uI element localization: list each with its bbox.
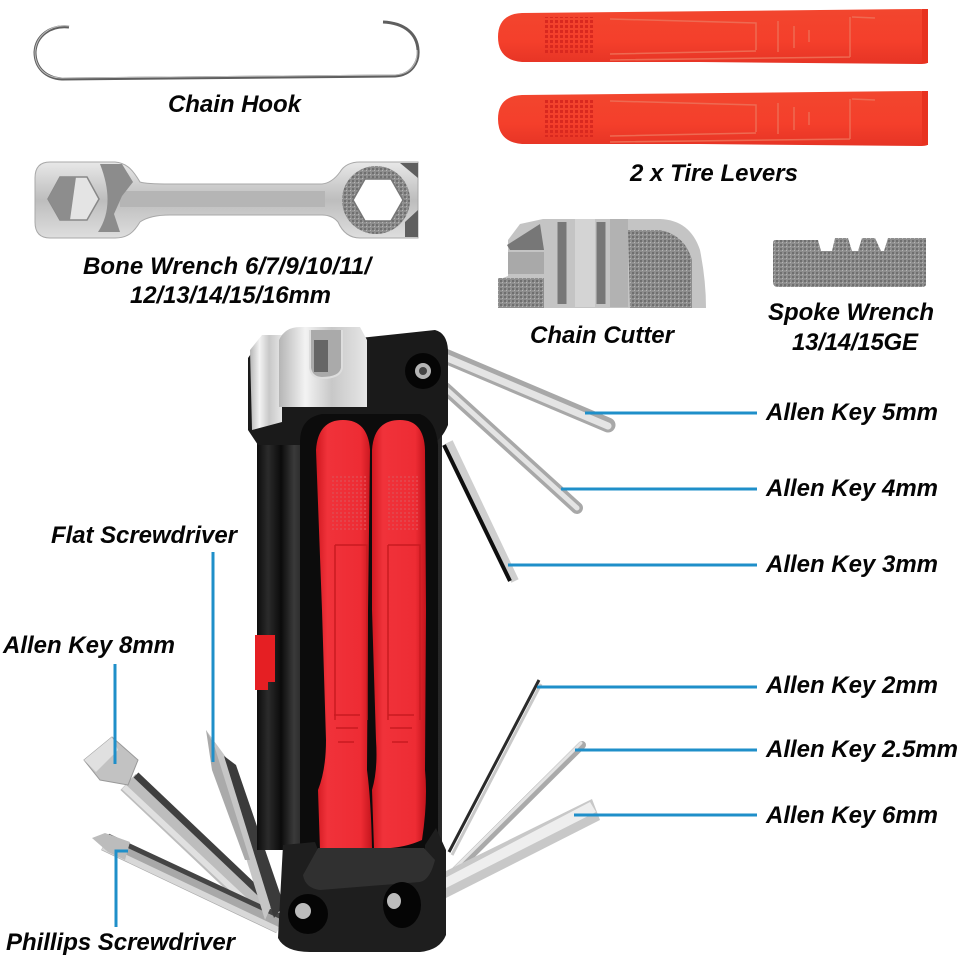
label: tire levers: 2 x Tire Levers: [629, 160, 798, 187]
label: chain hook: Chain Hook: [168, 91, 303, 118]
label: spoke wrench: [768, 299, 934, 356]
label: allen key 2.5mm: Allen Key 2.5mm: [765, 736, 958, 763]
chain cutter: [498, 219, 706, 308]
callout line: phillips screwdriver: [116, 851, 128, 927]
label: allen key 3mm: Allen Key 3mm: [765, 551, 938, 578]
callout line: allen key 2.5mm: [575, 748, 757, 752]
callout line: flat screwdriver: [212, 552, 214, 762]
label: bone wrench: [83, 253, 373, 309]
label: flat screwdriver: Flat Screwdriver: [51, 522, 239, 549]
bottom right screw: [383, 882, 421, 928]
lever recess: [300, 414, 438, 850]
spoke wrench: [773, 238, 926, 287]
top block: [248, 330, 448, 445]
callout line: allen key 3mm: [508, 564, 757, 566]
phillips screwdriver: [92, 833, 284, 930]
label: bone wrench: Bone Wrench 6/7/9/10/11/: [83, 253, 373, 280]
label: phillips screwdriver: Phillips Screwdriver: [6, 929, 237, 956]
tire lever 2: [498, 91, 928, 146]
chain hook: [35, 22, 418, 79]
bottom block: [278, 828, 446, 952]
label: spoke wrench: 13/14/15GE: [792, 329, 919, 356]
callout line: allen key 2mm: [537, 686, 757, 688]
callout line: allen key 6mm: [574, 814, 757, 816]
tire lever 1: [498, 9, 928, 64]
allen key 4mm: [445, 388, 577, 508]
callout line: allen key 8mm: [114, 664, 116, 764]
label: allen key 2mm: Allen Key 2mm: [765, 672, 938, 699]
red lever left: [316, 420, 372, 853]
callout line: allen key 5mm: [585, 412, 757, 414]
allen key 5mm: [445, 356, 608, 426]
bone wrench: [35, 162, 418, 238]
label: allen key 4mm: Allen Key 4mm: [765, 475, 938, 502]
allen key 3mm: [444, 442, 515, 581]
allen key 8mm: [84, 737, 278, 922]
cutter slot: [310, 330, 342, 378]
bottom left screw: [288, 894, 328, 934]
side red button: [255, 635, 275, 690]
label: spoke wrench: Spoke Wrench: [768, 299, 934, 326]
label: allen key 5mm: Allen Key 5mm: [765, 399, 938, 426]
label: bone wrench: 12/13/14/15/16mm: [130, 282, 331, 309]
allen key 6mm: [444, 799, 600, 898]
label: chain cutter: Chain Cutter: [530, 322, 676, 349]
flat screwdriver: [206, 730, 284, 920]
allen key 2mm: [449, 680, 541, 855]
black main handle: [257, 420, 442, 850]
label: allen key 8mm: Allen Key 8mm: [2, 632, 175, 659]
callout line: allen key 4mm: [561, 488, 757, 490]
top screw: [405, 353, 441, 389]
multi-tool body: [248, 327, 448, 952]
red lever right: [372, 420, 426, 848]
chrome bracket: [250, 335, 282, 430]
allen key 2.5mm: [447, 743, 582, 878]
chrome cutter cap: [279, 327, 367, 407]
label: allen key 6mm: Allen Key 6mm: [765, 802, 938, 829]
